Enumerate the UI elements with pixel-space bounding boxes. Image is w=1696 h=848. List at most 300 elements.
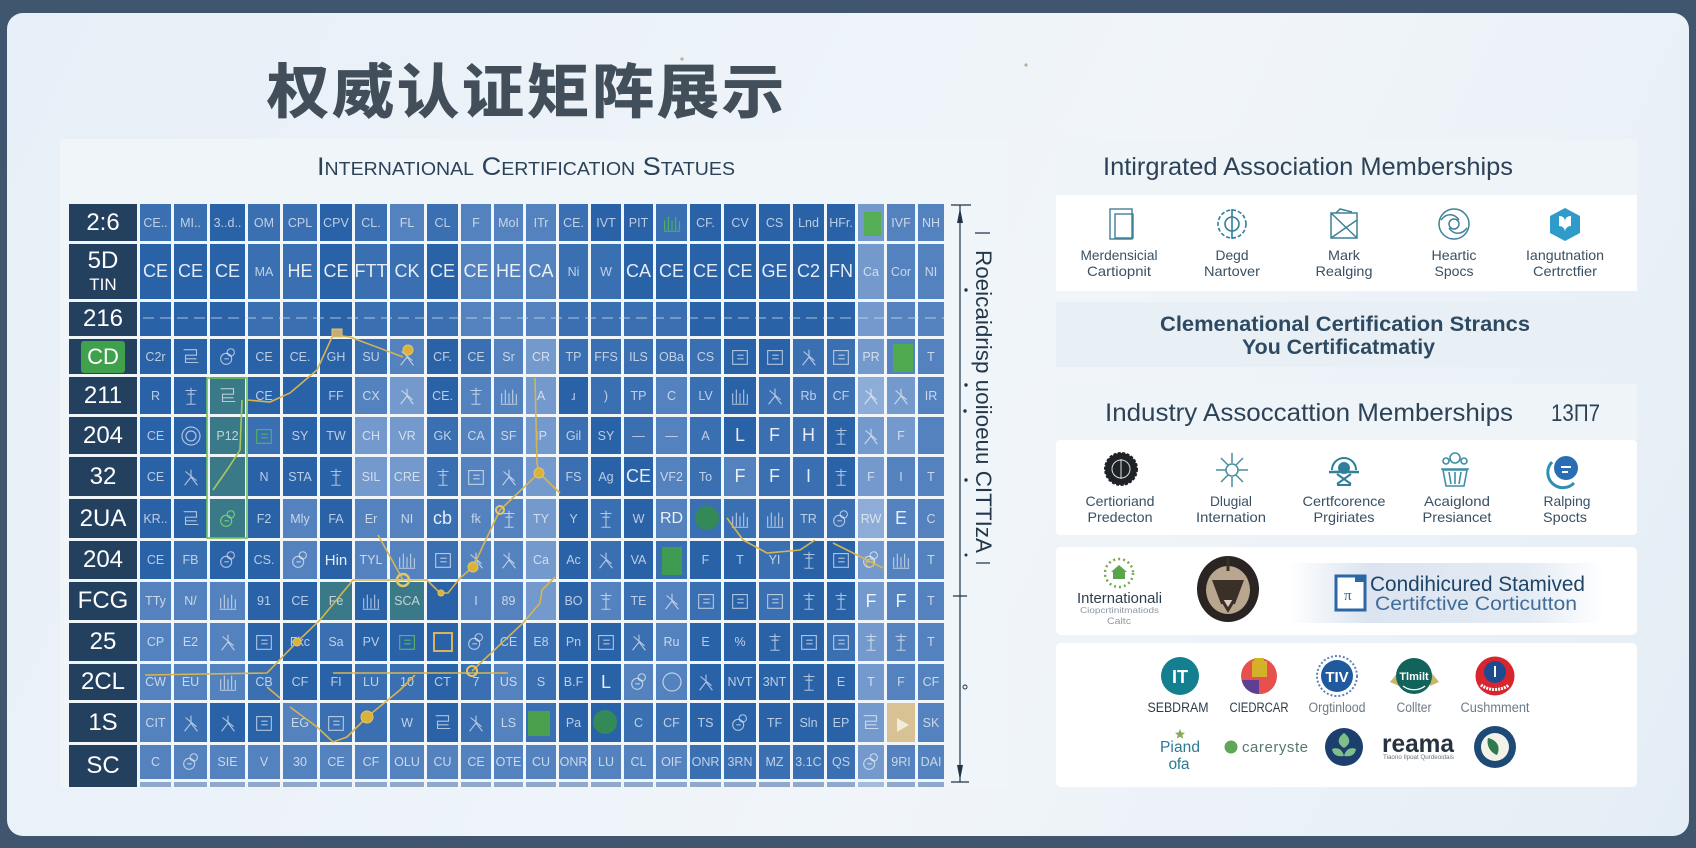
certification matrix grid: OIF (661, 755, 682, 769)
row label 2: TIN (89, 275, 117, 294)
panel: member organisation logos (1056, 643, 1637, 787)
row label 12 (69, 664, 137, 700)
certification matrix grid: MZ (765, 755, 784, 769)
logo captions row: CIEDRCAR (1230, 700, 1289, 715)
icon labels row 1: Cartiopnit (1087, 263, 1151, 279)
certification matrix grid: TYL (360, 553, 382, 567)
certification matrix grid: F (896, 590, 906, 610)
certification matrix grid: T (927, 594, 935, 608)
certification matrix grid: HFr. (829, 216, 853, 230)
panel: industry association memberships header: Industry Assoccattion Memberships (1105, 399, 1513, 427)
logo: teal circle: IT (1172, 667, 1188, 687)
certification matrix grid: F (769, 425, 780, 445)
certification matrix grid: CPL (288, 216, 312, 230)
certification matrix grid: Fkc (290, 635, 310, 649)
certification matrix grid: Fe (329, 594, 343, 608)
row label 9 (69, 541, 137, 579)
certification matrix grid: CF. (433, 350, 452, 364)
certification matrix grid: CE (147, 428, 164, 442)
certification matrix grid: VR (398, 428, 416, 442)
icon labels row 2: Spocts (1543, 509, 1587, 525)
certification matrix grid: NH (922, 216, 940, 230)
certification matrix grid: N (259, 470, 269, 484)
certification matrix grid: CE (327, 755, 345, 769)
certification matrix grid: F (769, 466, 780, 486)
certification matrix grid: FL (400, 216, 414, 230)
certification matrix grid: CE (659, 261, 684, 281)
certification matrix grid: OTE (496, 755, 521, 769)
certification matrix grid: STA (288, 470, 312, 484)
certification matrix grid: KR.. (143, 512, 168, 526)
certification matrix grid: CF (363, 755, 379, 769)
certification matrix grid: CF (833, 388, 849, 402)
certification matrix grid: CE. (432, 388, 453, 402)
certification matrix grid: CE (693, 261, 718, 281)
trend line nodes (293, 329, 874, 723)
certification matrix grid: — (632, 428, 645, 442)
logo captions row: Orgtinlood (1308, 700, 1366, 715)
certification matrix grid: SY (292, 428, 308, 442)
row label 1: 2:6 (86, 208, 120, 236)
row label 6: 204 (83, 422, 123, 448)
icon labels row 2: Presiancet (1422, 509, 1492, 525)
icon: black gear seal (1105, 453, 1137, 485)
title: 权威认证矩阵展示 (267, 45, 787, 129)
logo: piand ofa: Piand (1160, 739, 1200, 756)
certification matrix grid: 7 (473, 675, 479, 689)
certification matrix grid: CE (215, 261, 240, 281)
certification matrix grid: R (151, 388, 160, 402)
logo: piand ofa (1160, 729, 1200, 773)
logo: navy leaf circle (1325, 728, 1363, 766)
logo: teal circle (1161, 657, 1199, 695)
row label 13: 1S (88, 708, 118, 736)
certification matrix grid: CV (731, 216, 749, 230)
icon: blue globe (1548, 456, 1578, 488)
certification matrix grid: T (927, 350, 935, 364)
certification matrix grid: Cor (891, 264, 911, 278)
certification matrix grid: PR (862, 350, 880, 364)
certification matrix grid: E2 (183, 635, 198, 649)
certification matrix grid: 3NT (763, 675, 786, 689)
certification matrix grid: NI (401, 512, 413, 526)
certification matrix grid: IVF (891, 216, 911, 230)
icon labels row 2: Predecton (1088, 509, 1152, 525)
certification matrix grid: — (665, 428, 678, 442)
icon labels row 1: Heartic (1432, 247, 1476, 263)
row label 14 (69, 745, 137, 787)
certification matrix grid: CT (434, 675, 451, 689)
certification matrix grid: FA (328, 512, 344, 526)
dashed row line (143, 317, 944, 319)
certification matrix grid: E8 (533, 635, 549, 649)
certification matrix grid: Ag (598, 470, 614, 484)
certification matrix grid: CE (626, 466, 651, 486)
certification matrix grid: 9RI (891, 755, 911, 769)
certification matrix grid: LV (698, 388, 713, 402)
row label 8: 2UA (80, 504, 126, 532)
row label 3 (69, 302, 137, 336)
certification matrix grid: CW (145, 675, 166, 689)
icon labels row 2 (1086, 493, 1590, 525)
icon: network (1216, 453, 1248, 487)
certification matrix grid: 30 (293, 755, 307, 769)
band: conditional stamp certification: π (1344, 588, 1352, 604)
certification matrix grid: V (260, 755, 268, 769)
logo: international green stamp: Ciopcrtinitmatiods (1080, 605, 1159, 615)
band: conditional stamp certification (1289, 563, 1605, 623)
icon labels row 2: Prgiriates (1314, 509, 1374, 525)
certification matrix grid: CL (630, 755, 646, 769)
certification matrix grid: SK (923, 716, 939, 730)
certification matrix grid: H (802, 425, 815, 445)
icon labels row 1: Certrctfier (1533, 263, 1597, 279)
icon: gear (1218, 209, 1246, 239)
certification matrix grid: 3..d.. (214, 216, 241, 230)
certification matrix grid: I (474, 594, 478, 608)
row label 14: SC (86, 752, 120, 779)
certification matrix grid: To (699, 470, 712, 484)
certification matrix grid: VF2 (660, 470, 683, 484)
certification matrix grid: FFS (594, 350, 618, 364)
certification matrix grid: Ac (566, 553, 581, 567)
certification matrix grid: MoI (498, 216, 519, 230)
green highlights in matrix (207, 212, 913, 736)
certification matrix grid: Lnd (798, 216, 819, 230)
certification matrix grid: Ru (664, 635, 679, 649)
axis with arrowheads (951, 205, 971, 782)
logo captions row: SEBDRAM (1148, 700, 1208, 715)
row label 1 (69, 204, 137, 241)
certification matrix grid: PIT (629, 216, 648, 230)
certification matrix grid: SY (598, 428, 614, 442)
certification matrix grid: 89 (502, 594, 515, 608)
certification matrix grid: CF (663, 716, 680, 730)
certification matrix grid: NI (925, 264, 937, 278)
row label 2 (69, 244, 137, 299)
certification matrix grid: ILS (629, 350, 648, 364)
certification matrix grid: IVT (596, 216, 616, 230)
certification matrix grid: CF (923, 675, 939, 689)
certification matrix grid: OM (254, 216, 274, 230)
certification matrix grid: Rb (800, 388, 816, 402)
icon: crown basket (1441, 453, 1469, 486)
logo: reama: reama (1382, 730, 1455, 758)
certification matrix grid: CP (147, 635, 164, 649)
certification matrix grid: ONR (560, 755, 587, 769)
certification matrix grid: CE (323, 261, 348, 281)
icon: document (1110, 209, 1133, 239)
certification matrix grid: C (634, 716, 643, 730)
certification matrix grid: Y (569, 512, 578, 526)
certification matrix grid: FS (566, 470, 581, 484)
certification matrix grid: E (837, 675, 845, 689)
certification matrix grid: CE (147, 470, 164, 484)
certification matrix grid: N/ (184, 594, 197, 608)
logo: careryste: careryste (1242, 739, 1308, 756)
certification matrix grid: Ca (863, 264, 879, 278)
certification matrix grid: SIL (362, 470, 380, 484)
row label 4: green badge (69, 339, 137, 374)
row label 11: 25 (90, 628, 116, 655)
logo: navy seal (1474, 726, 1516, 768)
certification matrix grid: LU (598, 755, 614, 769)
row label 10: FCG (78, 587, 128, 614)
panel: integrated memberships icons (1056, 195, 1637, 291)
certification matrix grid: F (472, 216, 480, 230)
row label 8 (69, 499, 137, 538)
logo captions row: Cushmment (1460, 700, 1530, 715)
certification matrix grid: F (734, 466, 746, 486)
certification matrix grid: CE (430, 261, 455, 281)
row label 12: 2CL (81, 668, 125, 695)
certification matrix grid: CU (433, 755, 452, 769)
certification matrix grid: CE (178, 261, 203, 281)
certification matrix grid: CE. (290, 350, 310, 364)
certification matrix grid: 3RN (727, 755, 752, 769)
certification matrix grid: F (897, 428, 905, 442)
panel: industry association memberships header (1056, 384, 1637, 440)
certification matrix grid: Pn (566, 635, 581, 649)
certification matrix grid: E (895, 508, 907, 528)
certification matrix grid: 3.1C (795, 755, 822, 769)
certification matrix grid: T (927, 635, 935, 649)
certification matrix grid: Ca (533, 553, 549, 567)
certification matrix grid: CE.. (143, 216, 168, 230)
certification matrix grid: 10 (400, 675, 414, 689)
certification matrix grid: CE (463, 261, 488, 281)
certification matrix grid: MA (255, 264, 273, 278)
certification matrix grid: A (701, 428, 710, 442)
row label 4: green badge: CD (87, 344, 119, 368)
certification matrix grid: I (806, 466, 811, 486)
certification matrix grid: CE (727, 261, 752, 281)
certification matrix grid: LU (363, 675, 379, 689)
row label 5 (69, 377, 137, 414)
certification matrix grid: CS (697, 350, 714, 364)
certification matrix grid: CK (394, 261, 420, 281)
panel: certified logos strip (1056, 547, 1637, 635)
certification matrix grid: CF. (696, 216, 715, 230)
certification matrix grid: NVT (728, 675, 752, 689)
certification matrix grid: CR (532, 350, 550, 364)
icon labels row 1: Iangutnation (1526, 247, 1604, 263)
certification matrix grid: MI.. (180, 216, 201, 230)
certification matrix grid: YI (769, 553, 780, 567)
certification matrix grid: CA (528, 261, 554, 281)
certification matrix grid: fk (471, 512, 481, 526)
certification matrix grid: FI (330, 675, 342, 689)
certification matrix grid: TW (326, 428, 346, 442)
certification matrix grid: TF (767, 716, 782, 730)
certification matrix grid: SU (362, 350, 380, 364)
certification matrix grid: CPV (323, 216, 349, 230)
certification matrix grid: CE (147, 553, 164, 567)
certification matrix grid: F2 (257, 512, 271, 526)
logo: reama: Tiaono Ilpoat Qurdeoidais (1383, 754, 1455, 761)
row label 5: 211 (84, 382, 122, 408)
certification matrix grid: F (897, 675, 905, 689)
certification matrix grid: TP (630, 388, 646, 402)
certification matrix grid: PV (363, 635, 379, 649)
certification matrix grid: CIT (145, 716, 166, 730)
panel: integrated association memberships header (1056, 139, 1637, 195)
certification matrix grid: CA (467, 428, 485, 442)
decorative specks near title (680, 57, 1028, 67)
icon labels row 1: Mark (1328, 247, 1361, 263)
certification matrix grid: GK (433, 428, 452, 442)
certification matrix grid (69, 204, 944, 787)
icon: swirl (1439, 209, 1469, 239)
certification matrix grid: TTy (145, 594, 166, 608)
certification matrix grid: Ni (568, 264, 579, 278)
certification matrix grid: ONR (692, 755, 719, 769)
logo captions row: Collter (1396, 700, 1432, 715)
certification matrix grid: CF (292, 675, 308, 689)
certification matrix grid: F (866, 590, 876, 610)
row label 13 (69, 703, 137, 742)
band: conditional stamp certification: Certifctive Corticutton (1375, 593, 1577, 615)
certification matrix grid: TP (566, 350, 581, 364)
certification matrix grid: CU (532, 755, 550, 769)
certification matrix grid: I (899, 470, 903, 484)
certification matrix grid: CB (255, 675, 273, 689)
vertical axis label: Roeicaidrisp uoiioeuu CITTIzA (971, 250, 996, 553)
certification matrix grid: CL (434, 216, 450, 230)
certification matrix grid: C (667, 388, 676, 402)
certification matrix grid: ) (604, 388, 608, 402)
certification matrix grid: CL. (361, 216, 381, 230)
panel: certification callout (1056, 302, 1637, 367)
certification matrix grid: Er (365, 512, 377, 526)
certification matrix grid: CE (500, 635, 517, 649)
certification matrix grid: Gil (566, 428, 581, 442)
certification matrix grid: W (401, 716, 413, 730)
icon labels row 2: Certioriand (1086, 493, 1154, 509)
yellow trend lines (145, 335, 883, 742)
certification matrix grid: Mly (290, 512, 310, 526)
certification matrix grid: C2r (145, 350, 166, 364)
logo: blue ring seal: TIV (1325, 669, 1349, 686)
certification matrix grid: EU (182, 675, 199, 689)
certification matrix grid: IR (925, 388, 937, 402)
icon labels row 2: Acaiglond (1424, 493, 1490, 509)
certification matrix grid: LS (501, 716, 516, 730)
certification matrix grid: SIE (217, 755, 238, 769)
certification matrix grid: SF (500, 428, 516, 442)
logo: blue ring seal (1317, 656, 1357, 696)
certification matrix grid: P12 (216, 428, 239, 442)
panel: certification callout: You Certificatmatiy (1242, 335, 1435, 359)
certification matrix grid: RW (861, 512, 881, 526)
certification matrix grid: T (927, 470, 935, 484)
certification matrix grid: F (702, 553, 709, 567)
certification matrix grid: L (735, 425, 745, 445)
logo: multicolour circle (1241, 658, 1277, 694)
logo: international green stamp: Internationali (1077, 591, 1162, 607)
certification matrix grid: FN (829, 261, 853, 281)
certification matrix grid: 91 (257, 594, 271, 608)
logo: piand ofa: ofa (1168, 756, 1190, 773)
certification matrix grid: IP (535, 428, 547, 442)
certification matrix grid: % (734, 635, 746, 649)
certification matrix grid: TE (630, 594, 646, 608)
certification matrix grid: TS (698, 716, 713, 730)
logo: red badge (1476, 656, 1514, 696)
certification matrix grid: CA (626, 261, 651, 281)
certification matrix grid: Pa (566, 716, 581, 730)
certification matrix grid: B.F (564, 675, 583, 689)
band: conditional stamp certification: Condihicured Stamived (1370, 573, 1585, 596)
certification matrix grid: EP (833, 716, 849, 730)
certification matrix grid: CE (467, 350, 485, 364)
certification matrix grid: CX (362, 388, 380, 402)
certification matrix grid: ITr (534, 216, 548, 230)
certification matrix grid: W (600, 264, 612, 278)
certification matrix grid: VA (631, 553, 646, 567)
icon labels row 2: Internation (1196, 509, 1266, 525)
certification matrix grid: Sr (502, 350, 515, 364)
certification matrix grid: FF (328, 388, 344, 402)
icon labels row 2: Certfcorence (1302, 493, 1386, 509)
certification matrix grid: E (701, 635, 710, 649)
icon labels row 2: Ralping (1544, 493, 1590, 509)
certification matrix grid: RD (660, 510, 683, 526)
certification matrix grid: SCA (394, 594, 420, 608)
panel: industry memberships icons (1056, 440, 1637, 535)
certification matrix grid: CE (255, 388, 273, 402)
certification matrix grid: S (537, 675, 545, 689)
row label 11 (69, 623, 137, 661)
certification matrix grid: EG (291, 716, 309, 730)
row label 7: 32 (90, 462, 116, 490)
certification matrix grid: Sln (799, 716, 818, 730)
certification matrix grid: TY (533, 512, 549, 526)
certification matrix grid: CH (362, 428, 380, 442)
icon labels row 2: Dlugial (1210, 493, 1252, 509)
certification matrix grid: C2 (797, 261, 820, 281)
certification matrix grid: FB (182, 553, 198, 567)
certification matrix grid: Hin (325, 552, 347, 568)
certification matrix grid: CE (467, 755, 485, 769)
certification matrix grid: BO (564, 594, 583, 608)
logo: international green stamp: Caltc (1107, 616, 1131, 627)
panel: certification callout: Clemenational Certification Strancs (1160, 312, 1530, 336)
icon labels row 1: Degd (1216, 247, 1248, 263)
certification matrix grid: T (736, 553, 744, 567)
certification matrix grid: GE (761, 261, 788, 281)
certification matrix grid: F (867, 470, 875, 484)
row label 2: 5D (88, 247, 118, 274)
row label 7 (69, 457, 137, 496)
certification matrix grid: Sa (328, 635, 344, 649)
certification matrix grid: QS (832, 755, 850, 769)
certification matrix grid: CS (766, 216, 783, 230)
certification matrix grid: US (500, 675, 517, 689)
icon: blue hexagon book (1550, 208, 1580, 241)
icon: arch figure (1329, 458, 1359, 485)
certification matrix grid: L (601, 672, 611, 692)
certification matrix grid: CE (255, 350, 273, 364)
logo: dark green crest: Tlmilt (1399, 671, 1429, 683)
certification matrix grid: OBa (659, 350, 684, 364)
logo: international green stamp (1077, 559, 1162, 627)
panel: international certification statuses (60, 139, 1008, 788)
icon labels row 1: Merdensicial (1080, 247, 1158, 263)
certification matrix grid: CS. (254, 553, 274, 567)
certification matrix grid: HE (496, 261, 521, 281)
certification matrix grid: C (926, 512, 936, 526)
